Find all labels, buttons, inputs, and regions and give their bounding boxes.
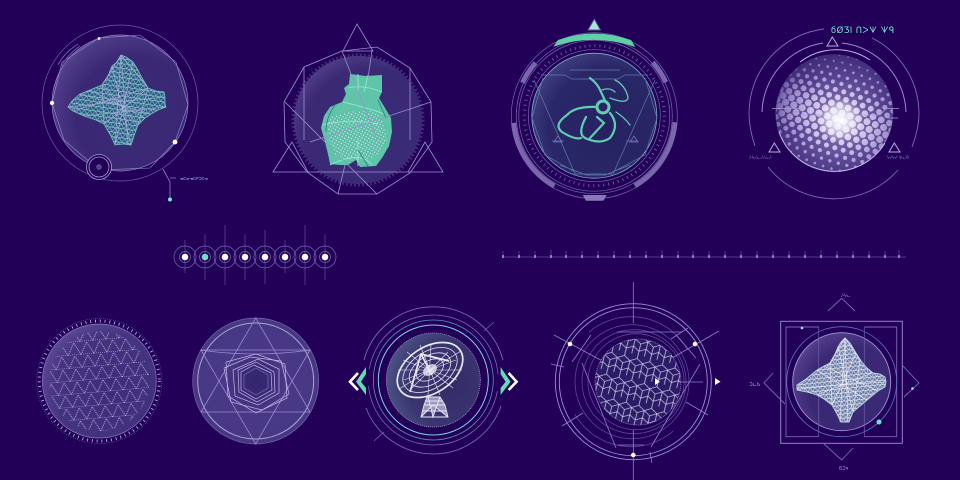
arrow markers xyxy=(655,378,720,385)
inner ring xyxy=(198,323,314,439)
teal arc xyxy=(553,34,635,47)
left label: ᔨᔭᓯᓚᓯᓯᓚᔨ xyxy=(749,155,772,160)
horizontal ticks xyxy=(772,108,899,118)
small target circle xyxy=(86,154,112,180)
gear edge xyxy=(293,55,423,185)
concentric arcs xyxy=(539,290,723,473)
star of david xyxy=(200,318,311,444)
rings xyxy=(174,246,336,268)
label: ᓀᑕᓂᓀᑕᑭᑐᑕᓀ xyxy=(180,176,208,181)
joint shape xyxy=(321,74,392,167)
panel: halftone sphere xyxy=(749,25,931,199)
outer arcs xyxy=(749,29,919,199)
left chevrons xyxy=(350,367,366,395)
bottom tab xyxy=(583,195,607,201)
ring xyxy=(787,327,897,437)
decagon frame and triangles xyxy=(273,24,443,194)
leader line xyxy=(163,169,176,198)
nested hexagons xyxy=(224,354,289,413)
node dots xyxy=(568,342,697,457)
rectangle overlap lines xyxy=(819,327,864,437)
teal dot xyxy=(202,254,208,260)
crosshair and frame lines xyxy=(551,282,719,480)
inner arcs xyxy=(762,43,906,112)
panel: framed terrain xyxy=(749,294,919,472)
outer ring xyxy=(42,25,198,181)
glass sphere xyxy=(52,35,188,171)
leader dot xyxy=(168,198,172,202)
tick ruler xyxy=(502,250,906,258)
panel: joint mesh in decagon xyxy=(273,24,443,194)
small inner triangles xyxy=(554,136,638,142)
outer arcs xyxy=(358,305,509,455)
panel: dot row xyxy=(174,225,336,285)
white node dots xyxy=(50,37,177,144)
diamond brackets xyxy=(764,298,919,460)
sphere xyxy=(193,318,319,444)
polygon outline xyxy=(52,35,188,170)
arc accent xyxy=(58,44,80,67)
panel: radio dish xyxy=(350,305,517,455)
inner geometry xyxy=(532,70,657,175)
purple side segments xyxy=(483,4,706,227)
tendril squiggle xyxy=(558,78,630,142)
right label: ᔭᓯᔭᓯ ᗐᓚᑫ xyxy=(887,155,909,160)
outer dotted ring xyxy=(37,318,162,444)
dish xyxy=(387,331,473,417)
teal node xyxy=(876,420,882,424)
terrain mesh xyxy=(797,338,886,422)
gauge rings xyxy=(511,33,677,199)
panel: wireframe terrain sphere xyxy=(42,25,208,202)
panel: hexagon star sphere xyxy=(193,318,319,444)
top label: ᔨᔭᓚ xyxy=(841,294,851,299)
cyan ring xyxy=(378,325,488,435)
lattice xyxy=(49,331,149,431)
panel: tendril gauge xyxy=(483,4,706,227)
tick ring xyxy=(39,321,159,441)
left label: ᑐᓚᑲ xyxy=(749,382,760,388)
outer square xyxy=(781,321,902,443)
right chevrons xyxy=(501,367,517,395)
triangle markers xyxy=(769,37,900,152)
top triangle xyxy=(588,19,600,30)
cube sphere xyxy=(595,339,681,425)
terrain mesh xyxy=(68,55,166,145)
top label: ϭØƷI ᑎᐳᗐ ᗐᑫ xyxy=(831,25,895,36)
outer rings xyxy=(555,304,711,460)
inner sphere xyxy=(532,53,657,178)
sphere xyxy=(42,324,156,438)
sphere xyxy=(386,333,480,427)
panel: cube mesh globe xyxy=(539,282,723,480)
accent dots xyxy=(801,327,914,390)
bottom label: ϭᑐ٩ xyxy=(839,465,849,472)
sphere xyxy=(793,333,891,431)
halftone ball xyxy=(775,49,894,172)
sphere xyxy=(294,56,422,184)
panel: dotted lattice globe xyxy=(37,318,162,444)
vertical guides xyxy=(185,225,325,285)
inner rectangles xyxy=(786,327,897,437)
white dots xyxy=(182,254,328,260)
